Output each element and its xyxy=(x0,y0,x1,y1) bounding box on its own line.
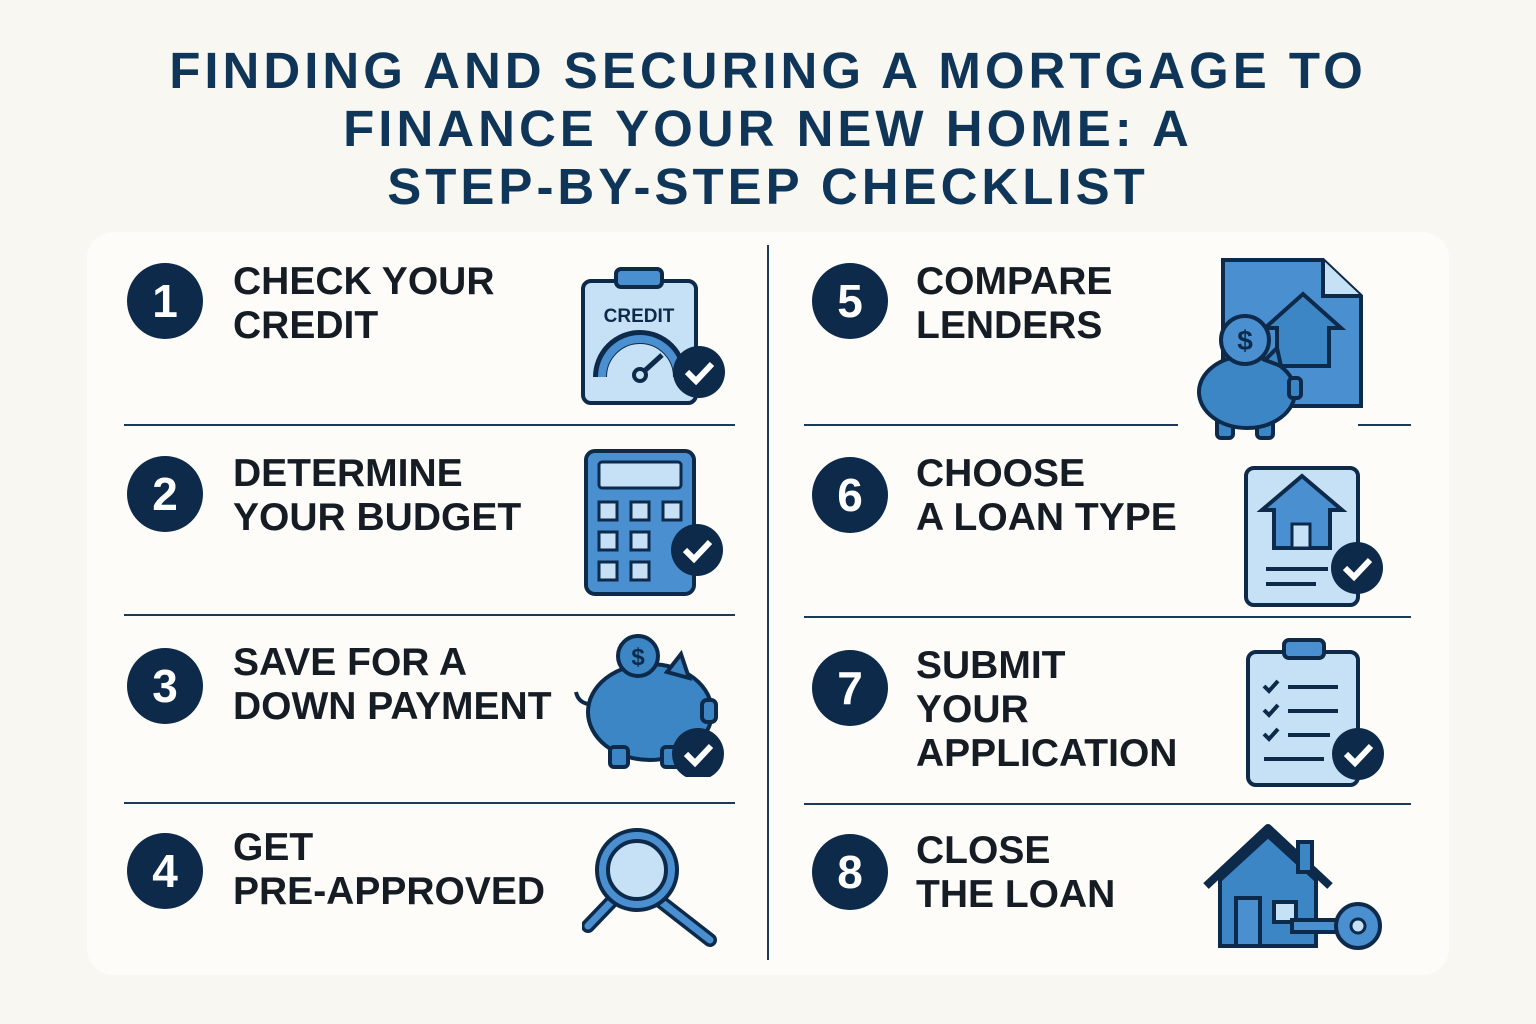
step 1 text: CREDIT xyxy=(233,304,378,347)
step 4 text: GET xyxy=(233,826,313,869)
step 5 number xyxy=(812,263,888,339)
icon: document house piggy: $ xyxy=(1237,325,1253,356)
step 7 text: SUBMIT xyxy=(916,644,1066,687)
step 3 text xyxy=(233,641,552,728)
step 3 number: 3 xyxy=(152,660,178,712)
step 5 text: LENDERS xyxy=(916,304,1102,347)
step 6 number: 6 xyxy=(837,469,863,521)
step 2 number: 2 xyxy=(152,468,178,520)
step 3 number xyxy=(127,648,203,724)
step 7 text xyxy=(916,644,1177,775)
step 3 text: DOWN PAYMENT xyxy=(233,685,552,728)
icon: document house piggy xyxy=(1197,258,1363,440)
step 7 text: YOUR xyxy=(916,688,1029,731)
step 8 number: 8 xyxy=(837,846,863,898)
title xyxy=(169,42,1367,215)
step 4 number xyxy=(127,833,203,909)
step 5 text xyxy=(916,260,1112,347)
step 1 text: CHECK YOUR xyxy=(233,260,494,303)
step 2 number xyxy=(127,456,203,532)
step 8 text: CLOSE xyxy=(916,829,1050,872)
icon: house with key xyxy=(1203,824,1382,950)
step 8 number xyxy=(812,834,888,910)
title: FINANCE YOUR NEW HOME: A xyxy=(343,100,1193,157)
step 5 number: 5 xyxy=(837,275,863,327)
step 4 text: PRE-APPROVED xyxy=(233,870,545,913)
step 4 text xyxy=(233,826,545,913)
step 8 text xyxy=(916,829,1115,916)
step 7 number: 7 xyxy=(837,662,863,714)
step 7 number xyxy=(812,650,888,726)
icon: credit clipboard xyxy=(581,267,725,405)
step 6 text: A LOAN TYPE xyxy=(916,496,1177,539)
panel: checklist xyxy=(87,232,1449,975)
step 1 number: 1 xyxy=(152,275,178,327)
icon: magnifier xyxy=(582,828,717,947)
icon: credit clipboard: CREDIT xyxy=(604,306,675,327)
icon: loan document xyxy=(1244,466,1383,607)
title: FINDING AND SECURING A MORTGAGE TO xyxy=(169,42,1367,99)
step 2 text xyxy=(233,452,521,539)
step 1 text xyxy=(233,260,494,347)
step 8 text: THE LOAN xyxy=(916,873,1115,916)
icon: application clipboard xyxy=(1246,638,1384,787)
icon: calculator xyxy=(584,449,723,596)
step 5 text: COMPARE xyxy=(916,260,1112,303)
step 4 number: 4 xyxy=(152,845,178,897)
icon: piggy bank xyxy=(574,634,724,777)
step 3 text: SAVE FOR A xyxy=(233,641,467,684)
step 7 text: APPLICATION xyxy=(916,732,1177,775)
step 6 text: CHOOSE xyxy=(916,452,1085,495)
step 6 number xyxy=(812,457,888,533)
step 2 text: DETERMINE xyxy=(233,452,463,495)
step 2 text: YOUR BUDGET xyxy=(233,496,521,539)
step 6 text xyxy=(916,452,1177,539)
title: STEP-BY-STEP CHECKLIST xyxy=(387,158,1149,215)
step 1 number xyxy=(127,263,203,339)
icon: piggy bank: $ xyxy=(631,644,645,671)
